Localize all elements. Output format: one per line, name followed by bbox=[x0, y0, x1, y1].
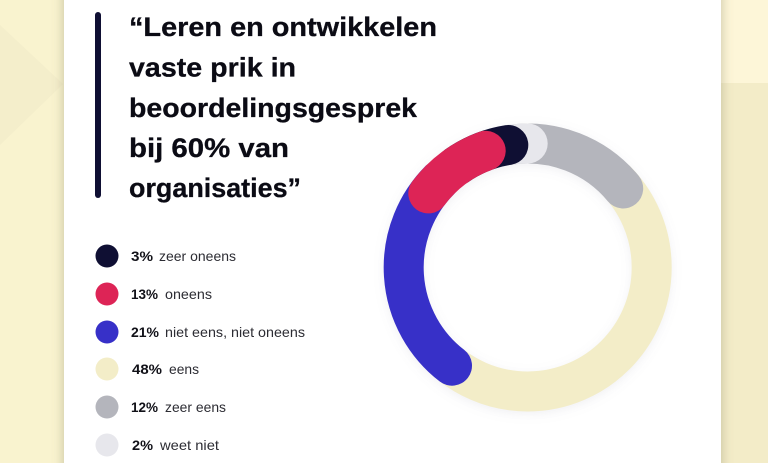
segment: weet niet 2% bbox=[496, 143, 528, 148]
quote accent bar bbox=[95, 12, 101, 198]
title quote bbox=[129, 12, 437, 203]
legend bbox=[96, 244, 305, 456]
segment: eens 48% bbox=[440, 180, 652, 391]
title quote: “Leren en ontwikkelen bbox=[129, 12, 437, 42]
legend item: zeer eens: zeer eens bbox=[165, 399, 226, 415]
legend item: oneens: 13% bbox=[131, 286, 159, 302]
legend item: niet eens, niet oneens: 21% bbox=[131, 324, 160, 340]
title quote: bij 60% van bbox=[129, 133, 289, 163]
legend item: zeer eens bbox=[96, 396, 226, 418]
background: right panel bbox=[721, 0, 768, 463]
legend item: eens bbox=[96, 358, 199, 380]
title quote: organisaties” bbox=[129, 173, 301, 203]
legend item: niet eens, niet oneens bbox=[96, 320, 305, 344]
legend item: zeer oneens: 3% bbox=[131, 248, 154, 264]
legend item: zeer oneens: zeer oneens bbox=[159, 248, 236, 264]
segment: zeer eens 12% bbox=[510, 143, 623, 188]
legend item: eens: 48% bbox=[132, 361, 163, 377]
legend item: eens: eens bbox=[169, 361, 199, 377]
legend item: weet niet: 2% bbox=[132, 437, 154, 453]
background: left panel with triangle bbox=[0, 0, 64, 463]
legend item: zeer oneens bbox=[96, 244, 236, 268]
title quote: beoordelingsgesprek bbox=[129, 93, 418, 123]
segment: zeer oneens 3% bbox=[457, 145, 508, 166]
segment: oneens 13% bbox=[428, 151, 486, 193]
segment: niet eens, niet oneens 21% bbox=[404, 180, 452, 366]
legend item: niet eens, niet oneens: niet eens, niet oneens bbox=[165, 324, 305, 340]
legend item: weet niet bbox=[96, 434, 219, 456]
legend item: weet niet: weet niet bbox=[159, 437, 219, 453]
donut chart bbox=[404, 143, 652, 394]
legend item: oneens: oneens bbox=[165, 286, 212, 302]
legend item: zeer eens: 12% bbox=[131, 399, 159, 415]
legend item: oneens bbox=[96, 282, 212, 306]
title quote: vaste prik in bbox=[129, 52, 296, 82]
